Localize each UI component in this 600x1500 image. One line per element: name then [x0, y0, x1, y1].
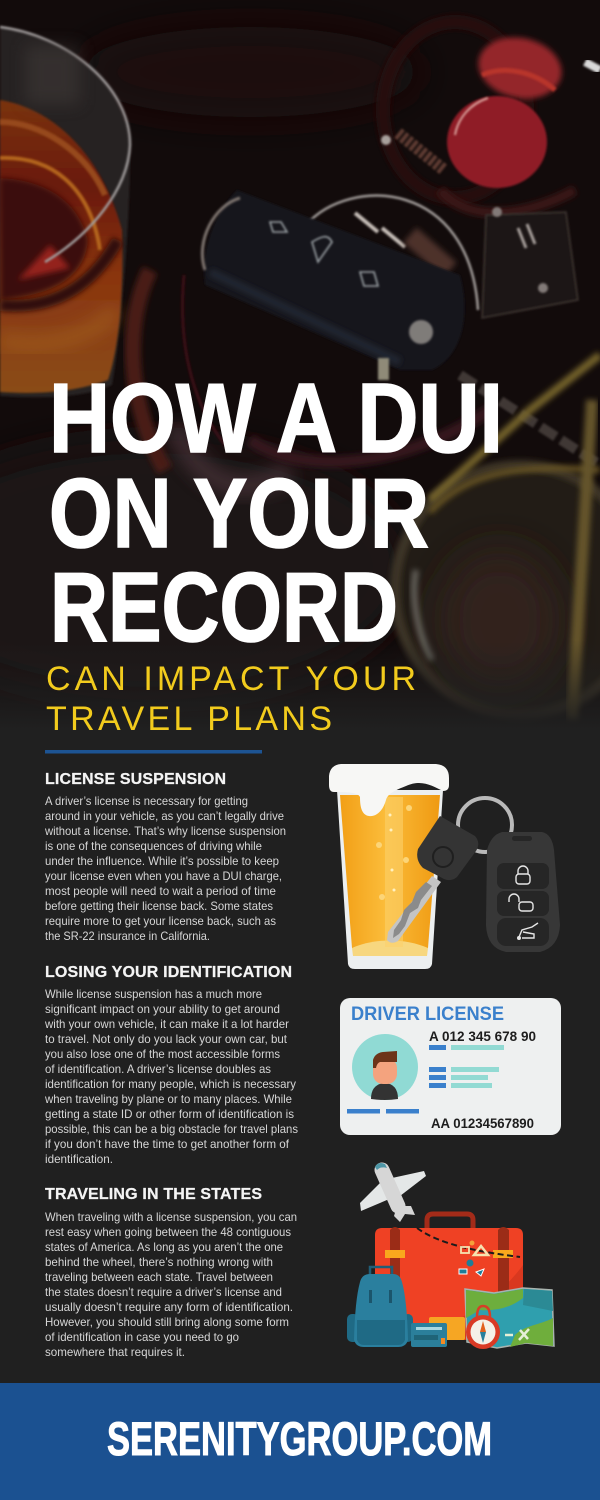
card data bars [429, 1045, 504, 1088]
title: HOW A DUI [49, 363, 503, 473]
photo: red plate edge [133, 270, 490, 486]
text block: traveling in the states: usually doesn’t require any form of identification. [45, 1300, 293, 1314]
icon: driver license card [340, 998, 561, 1135]
icon: remote fob [486, 832, 560, 952]
text block: license suspension: your license even when you have a DUI charge, [45, 869, 282, 883]
card signature bars [347, 1109, 419, 1114]
text block: losing your identification: when traveling by plane or to many places. While [44, 1092, 292, 1106]
text block: traveling in the states: of identification in case you need to go [45, 1330, 239, 1344]
text block: traveling in the states: states of America. As long as you aren’t the one [45, 1240, 283, 1254]
text block: losing your identification: identification. [45, 1152, 113, 1166]
heading: losing your identification: LOSING YOUR IDENTIFICATION [45, 964, 292, 981]
icon: key [387, 816, 478, 943]
text block: license suspension: without a license. That’s why license suspension [44, 824, 286, 838]
card title: DRIVER LICENSE [351, 1004, 504, 1025]
icon: travel gear [347, 1163, 554, 1349]
subtitle: CAN IMPACT YOUR [46, 660, 416, 698]
icon: airplane [360, 1163, 426, 1222]
photo: fade to dark [0, 640, 600, 760]
icon: suitcase [375, 1214, 523, 1340]
title: RECORD [50, 552, 398, 662]
section: traveling in the states [45, 1186, 297, 1359]
text block: traveling in the states: somewhere that requires it. [45, 1345, 185, 1359]
heading: license suspension: LICENSE SUSPENSION [45, 771, 226, 788]
photo: metal fob behind key [306, 196, 600, 465]
icon: map [465, 1288, 554, 1348]
photo: whisky glass [0, 27, 130, 397]
photo: brass scale and lens [395, 355, 600, 720]
text block: license suspension: most people will need to wait a period of time [45, 884, 276, 898]
photo: red wax bottle top [381, 22, 600, 213]
text block: license suspension: around in your vehicle, as you can’t legally drive [45, 809, 284, 823]
icon: key ring [458, 798, 512, 852]
text block: losing your identification: to travel. Not only do you lack your own car, but [45, 1032, 288, 1046]
text block: traveling in the states: behind the wheel, there’s nothing wrong with [45, 1255, 273, 1269]
section: license suspension [44, 771, 286, 943]
text block: license suspension: before getting their license back. Some states [45, 899, 273, 913]
footer band [0, 1383, 600, 1500]
title: ON YOUR [49, 458, 429, 568]
subtitle [46, 660, 416, 738]
text block: license suspension: under the influence. While it’s possible to keep [45, 854, 279, 868]
icon: beer glass with car keys [329, 764, 560, 969]
icon: compass [466, 1306, 500, 1349]
text block: traveling in the states: rest easy when going between the 48 contiguous [45, 1225, 291, 1239]
text block: losing your identification: with your own vehicle, it can make it a lot harder [44, 1017, 289, 1031]
card id number: AA 01234567890 [431, 1115, 534, 1131]
section: losing your identification [44, 964, 298, 1166]
hero photo: whisky glass, car key and scales [0, 0, 600, 760]
text block: license suspension: is one of the consequences of driving while [45, 839, 262, 853]
text block: losing your identification: if you don’t have the time to get another form of [45, 1137, 290, 1151]
photo: dark wood table [0, 0, 600, 760]
text block: license suspension [44, 794, 286, 943]
text block: losing your identification: significant impact on your ability to get around [45, 1002, 280, 1016]
subtitle: TRAVEL PLANS [46, 700, 332, 738]
text block: traveling in the states: However, you should still bring along some form [45, 1315, 289, 1329]
text block: losing your identification: of identification. A driver’s license doubles as [45, 1062, 271, 1076]
icon: beer glass [329, 764, 449, 969]
text block: losing your identification: possible, this can be a big obstacle for travel plans [45, 1122, 298, 1136]
text block: traveling in the states: the states doesn’t require a driver’s license and [45, 1285, 282, 1299]
text block: license suspension: the SR-22 insurance in California. [45, 929, 210, 943]
text block: losing your identification: you also lose one of the most accessible forms [45, 1047, 280, 1061]
text block: losing your identification [44, 987, 298, 1166]
heading: traveling in the states: TRAVELING IN THE STATES [45, 1186, 262, 1203]
text block: losing your identification: While license suspension has a much more [45, 987, 262, 1001]
icon: backpack [347, 1267, 413, 1347]
text block: license suspension: require more to get your license back, such as [45, 914, 276, 928]
icon: tickets [411, 1317, 465, 1347]
blue divider [45, 750, 262, 754]
text block: traveling in the states: When traveling with a license suspension, you can [45, 1210, 297, 1224]
text block: license suspension: A driver’s license is necessary for getting [45, 794, 248, 808]
text block: losing your identification: identification for many people, which is necessary [45, 1077, 296, 1091]
foam [329, 764, 449, 816]
photo: car key [202, 190, 465, 380]
text block: losing your identification: getting a state ID or other form of identification is [45, 1107, 294, 1121]
card number: A 012 345 678 90 [429, 1028, 536, 1044]
card portrait [352, 1034, 418, 1100]
text block: traveling in the states: traveling between each state. Travel between [45, 1270, 273, 1284]
title [49, 363, 503, 662]
text block: traveling in the states [45, 1210, 297, 1359]
